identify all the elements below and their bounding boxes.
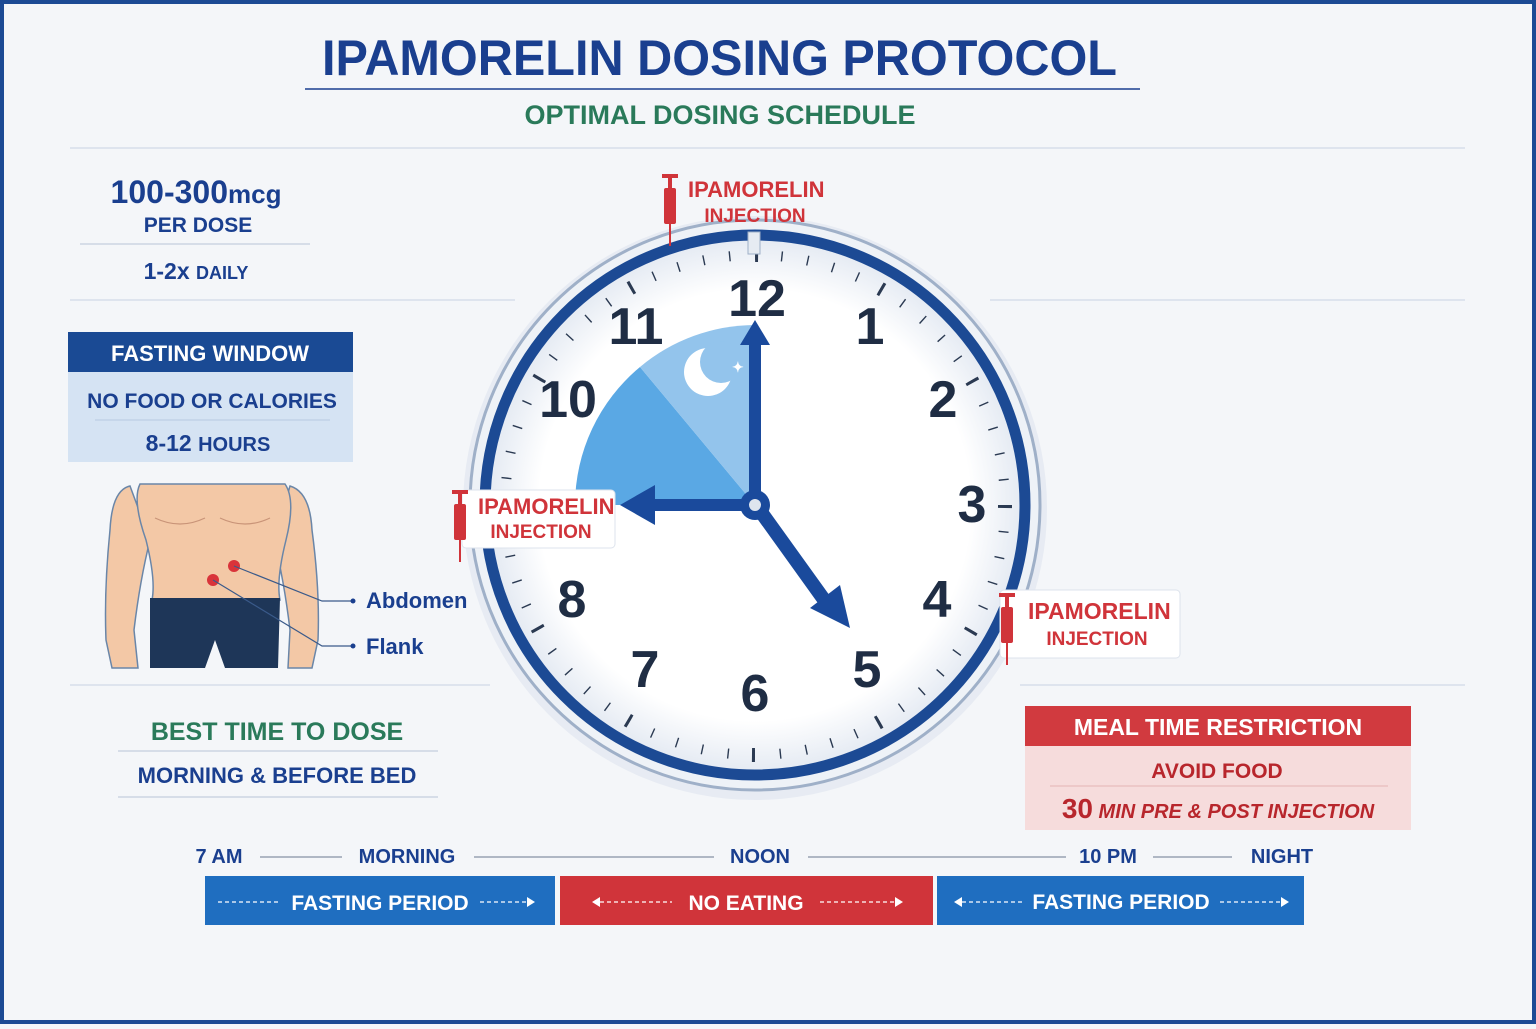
dose info: PER DOSE — [144, 214, 252, 237]
clock: 1 — [856, 298, 884, 356]
callout: right injection — [999, 590, 1180, 665]
dose info: 1-2x DAILY — [144, 258, 248, 284]
timeline bars: FASTING PERIOD — [291, 892, 469, 915]
callout: left injection: INJECTION — [490, 522, 592, 543]
timeline labels: NIGHT — [1251, 846, 1313, 868]
clock: 5 — [853, 641, 881, 699]
clock hands — [620, 320, 850, 628]
clock: 12 — [728, 270, 786, 328]
callout: top injection — [662, 174, 824, 246]
fasting wedge — [575, 367, 755, 505]
clock: 7 — [631, 641, 659, 699]
clock: 11 — [609, 298, 663, 356]
clock: 10 — [539, 371, 597, 429]
best time to dose — [118, 718, 438, 797]
timeline labels: NOON — [730, 846, 790, 868]
callout: right injection: INJECTION — [1046, 629, 1148, 650]
timeline labels — [195, 846, 1313, 868]
callout: top injection: INJECTION — [704, 206, 806, 227]
clock: 3 — [958, 476, 986, 534]
torso — [137, 484, 291, 600]
icon: moon — [684, 341, 744, 396]
icon: moon: ✦ — [732, 359, 744, 375]
timeline labels: 7 AM — [195, 846, 243, 868]
callout: left injection — [452, 490, 615, 562]
timeline labels: 10 PM — [1079, 846, 1137, 868]
dose info: 100-300mcg — [111, 174, 281, 210]
dose info — [80, 174, 310, 284]
timeline labels: MORNING — [359, 846, 455, 868]
clock: 8 — [558, 571, 586, 629]
callout: right injection: IPAMORELIN — [1028, 598, 1171, 624]
icon: torso with injection sites — [106, 484, 356, 668]
clock: 4 — [923, 571, 952, 629]
timeline bars: FASTING PERIOD — [1032, 891, 1210, 914]
arms — [106, 486, 150, 668]
panel: fasting window: 8-12 HOURS — [146, 430, 270, 456]
timeline bars — [205, 876, 1304, 925]
subtitle: OPTIMAL DOSING SCHEDULE — [524, 100, 916, 130]
label: abdomen: Abdomen — [366, 588, 467, 613]
panel: meal time restriction: AVOID FOOD — [1151, 760, 1283, 783]
best time to dose: MORNING & BEFORE BED — [138, 763, 416, 788]
timeline bars: NO EATING — [688, 892, 804, 915]
label: flank: Flank — [366, 634, 424, 659]
panel: fasting window: FASTING WINDOW — [111, 341, 309, 366]
title: IPAMORELIN DOSING PROTOCOL — [322, 30, 1117, 86]
clock: 2 — [929, 371, 957, 429]
callout: left injection: IPAMORELIN — [478, 494, 614, 519]
panel: fasting window: NO FOOD OR CALORIES — [87, 390, 337, 413]
panel: meal time restriction: 30 MIN PRE & POST INJECTION — [1062, 793, 1375, 824]
panel: meal time restriction — [1025, 706, 1411, 830]
callout: top injection: IPAMORELIN — [688, 177, 824, 202]
panel: meal time restriction: MEAL TIME RESTRICTION — [1074, 714, 1362, 740]
best time to dose: BEST TIME TO DOSE — [151, 718, 403, 746]
clock — [463, 216, 1047, 800]
panel: fasting window — [68, 332, 353, 462]
clock: 6 — [741, 665, 769, 723]
